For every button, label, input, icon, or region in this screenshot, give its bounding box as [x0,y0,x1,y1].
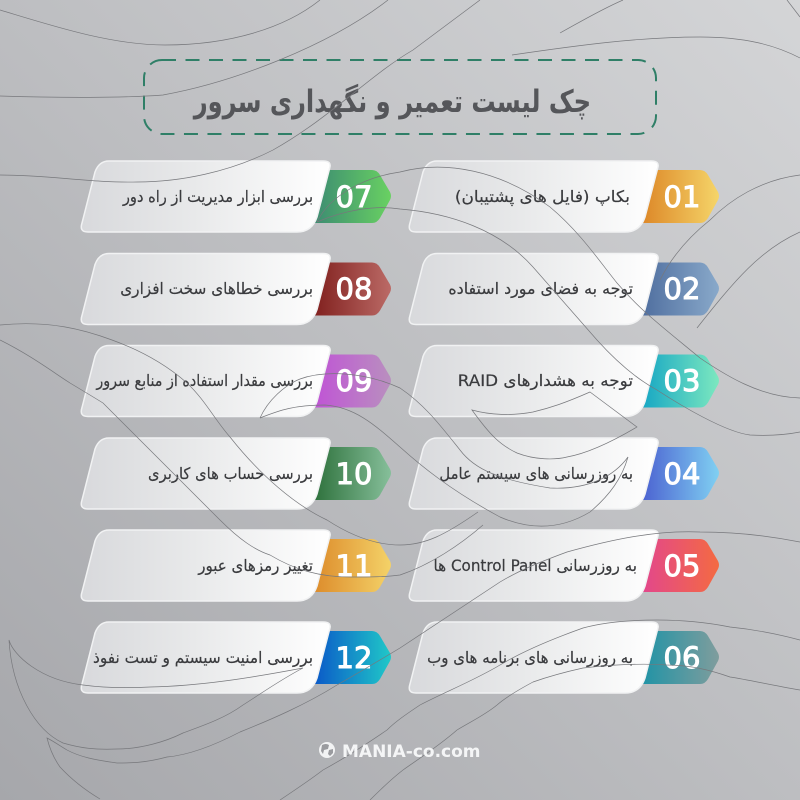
item 01: بکاپ (فایل های پشتیبان) [455,187,630,207]
item 06: 06 [664,641,700,675]
footer website: MANIA-co.com [342,742,481,762]
title box [144,60,656,134]
item 01 [409,161,719,232]
item 12: بررسی امنیت سیستم و تست نفوذ [93,648,313,668]
item 11: 11 [336,549,372,583]
item 07 [81,161,391,232]
item 03: 03 [664,364,700,398]
icon: globe [319,742,335,758]
item 12 [81,622,391,693]
title: چک لیست تعمیر و نگهداری سرور [192,83,591,120]
item 05: 05 [664,549,700,583]
item 04: 04 [664,457,700,491]
item 08: بررسی خطاهای سخت افزاری [120,279,313,299]
item 03: توجه به هشدارهای RAID [458,371,633,391]
item 07: بررسی ابزار مدیریت از راه دور [122,187,313,206]
item 10 [81,438,391,509]
item 09 [81,346,391,416]
item 08 [81,254,391,324]
item 09: بررسی مقدار استفاده از منابع سرور [95,371,313,390]
item 04: به روزرسانی های سیستم عامل [439,464,633,483]
item 07: 07 [336,180,372,214]
item 02: توجه به فضای مورد استفاده [448,279,633,299]
item 06 [409,622,719,693]
item 08: 08 [336,272,372,306]
item 11: تغییر رمزهای عبور [197,557,313,575]
item 09: 09 [336,364,372,398]
item 03 [409,346,719,416]
item 01: 01 [664,180,700,214]
item 05: به روزرسانی Control Panel ها [434,557,637,576]
item 10: بررسی حساب های کاربری [148,464,313,483]
item 04 [409,438,719,509]
item 06: به روزرسانی های برنامه های وب [427,649,633,668]
item 02 [409,254,719,324]
item 02: 02 [664,272,700,306]
item 10: 10 [336,457,372,491]
item 11 [81,530,391,601]
item 05 [409,530,719,601]
item 12: 12 [336,641,372,675]
